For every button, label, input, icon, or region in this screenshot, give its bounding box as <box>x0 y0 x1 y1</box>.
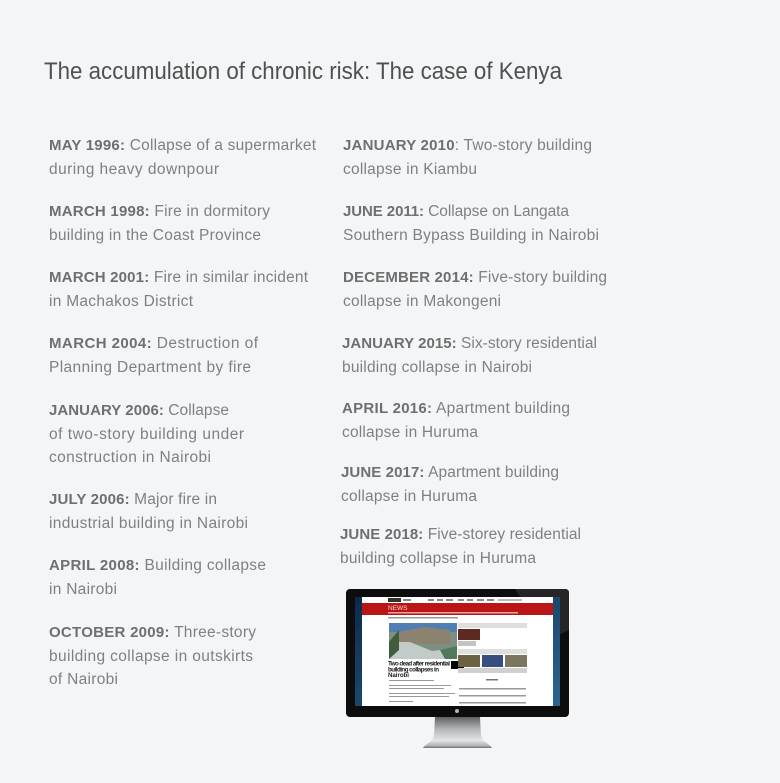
sub navigation <box>388 617 458 618</box>
event: April 2008 <box>49 557 266 598</box>
event: March 2004: Planning Department by fire <box>49 359 251 376</box>
article photo <box>389 623 457 659</box>
event: December 2014: collapse in Makongeni <box>343 293 501 310</box>
event: June 2018: building collapse in Huruma <box>340 550 536 567</box>
event: January 2010: collapse in Kiambu <box>343 161 477 178</box>
icon: desktop monitor showing BBC News article <box>346 589 569 748</box>
article body lines <box>389 680 455 702</box>
redaction block <box>451 661 464 669</box>
event: March 2001: in Machakos District <box>49 293 194 310</box>
event: January 2006 <box>49 402 244 466</box>
event: March 2001: MARCH 2001: Fire in similar incident <box>49 269 309 286</box>
event: April 2008: in Nairobi <box>49 581 117 598</box>
event: June 2017: collapse in Huruma <box>341 488 477 505</box>
event: June 2011: Southern Bypass Building in Nairobi <box>343 227 599 244</box>
event: June 2017: JUNE 2017: Apartment building <box>341 464 559 481</box>
event: March 2004: MARCH 2004: Destruction of <box>49 335 259 352</box>
event: March 2001 <box>49 269 309 310</box>
event: January 2006: JANUARY 2006: Collapse <box>49 402 229 419</box>
event: October 2009 <box>49 624 256 688</box>
article headline: Nairobi <box>388 672 409 679</box>
article headline: building collapses in <box>388 666 439 674</box>
event: July 2006 <box>49 491 248 532</box>
event: June 2018: JUNE 2018: Five-storey residential <box>340 526 581 543</box>
article headline: Two dead after residential <box>388 660 450 668</box>
event: January 2015: building collapse in Nairobi <box>342 359 532 376</box>
monitor stand <box>423 717 492 748</box>
event: July 2006: industrial building in Nairobi <box>49 515 248 532</box>
event: March 2004 <box>49 335 259 376</box>
event: January 2015 <box>342 335 597 376</box>
event: June 2018 <box>340 526 581 567</box>
event: October 2009: of Nairobi <box>49 671 118 688</box>
web page <box>362 597 553 706</box>
event: January 2015: JANUARY 2015: Six-story residential <box>342 335 597 352</box>
monitor bezel <box>346 589 569 717</box>
event: March 1998: MARCH 1998: Fire in dormitory <box>49 203 270 220</box>
monitor screen <box>355 597 560 706</box>
event: October 2009: building collapse in outskirts <box>49 648 253 665</box>
event: April 2016: collapse in Huruma <box>342 424 478 441</box>
event: April 2016 <box>342 400 570 441</box>
event: May 1996 <box>49 137 317 178</box>
top navigation <box>403 599 522 601</box>
BBC logo <box>388 598 401 602</box>
right column timeline <box>340 137 607 567</box>
event: July 2006: JULY 2006: Major fire in <box>49 491 217 508</box>
event: June 2017 <box>341 464 559 505</box>
event: December 2014: DECEMBER 2014: Five-story building <box>343 269 607 286</box>
news banner <box>362 603 553 615</box>
left column timeline <box>49 137 317 688</box>
article headline <box>388 660 450 679</box>
event: May 1996: MAY 1996: Collapse of a supermarket <box>49 137 317 154</box>
event: October 2009: OCTOBER 2009: Three-story <box>49 624 256 641</box>
news banner: NEWS <box>388 605 408 612</box>
event: January 2010: JANUARY 2010: Two-story building <box>343 137 592 154</box>
event: June 2011: JUNE 2011: Collapse on Langata <box>343 203 569 220</box>
event: January 2010 <box>343 137 592 178</box>
sidebar <box>458 623 527 704</box>
event: December 2014 <box>343 269 607 310</box>
event: May 1996: during heavy downpour <box>49 161 219 178</box>
event: March 1998 <box>49 203 270 244</box>
event: January 2006: of two-story building under <box>49 426 244 443</box>
event: April 2008: APRIL 2008: Building collapse <box>49 557 266 574</box>
event: March 1998: building in the Coast Province <box>49 227 261 244</box>
event: June 2011 <box>343 203 599 244</box>
event: April 2016: APRIL 2016: Apartment building <box>342 400 570 417</box>
title: The accumulation of chronic risk: The case of Kenya <box>44 58 563 85</box>
event: January 2006: construction in Nairobi <box>49 449 211 466</box>
